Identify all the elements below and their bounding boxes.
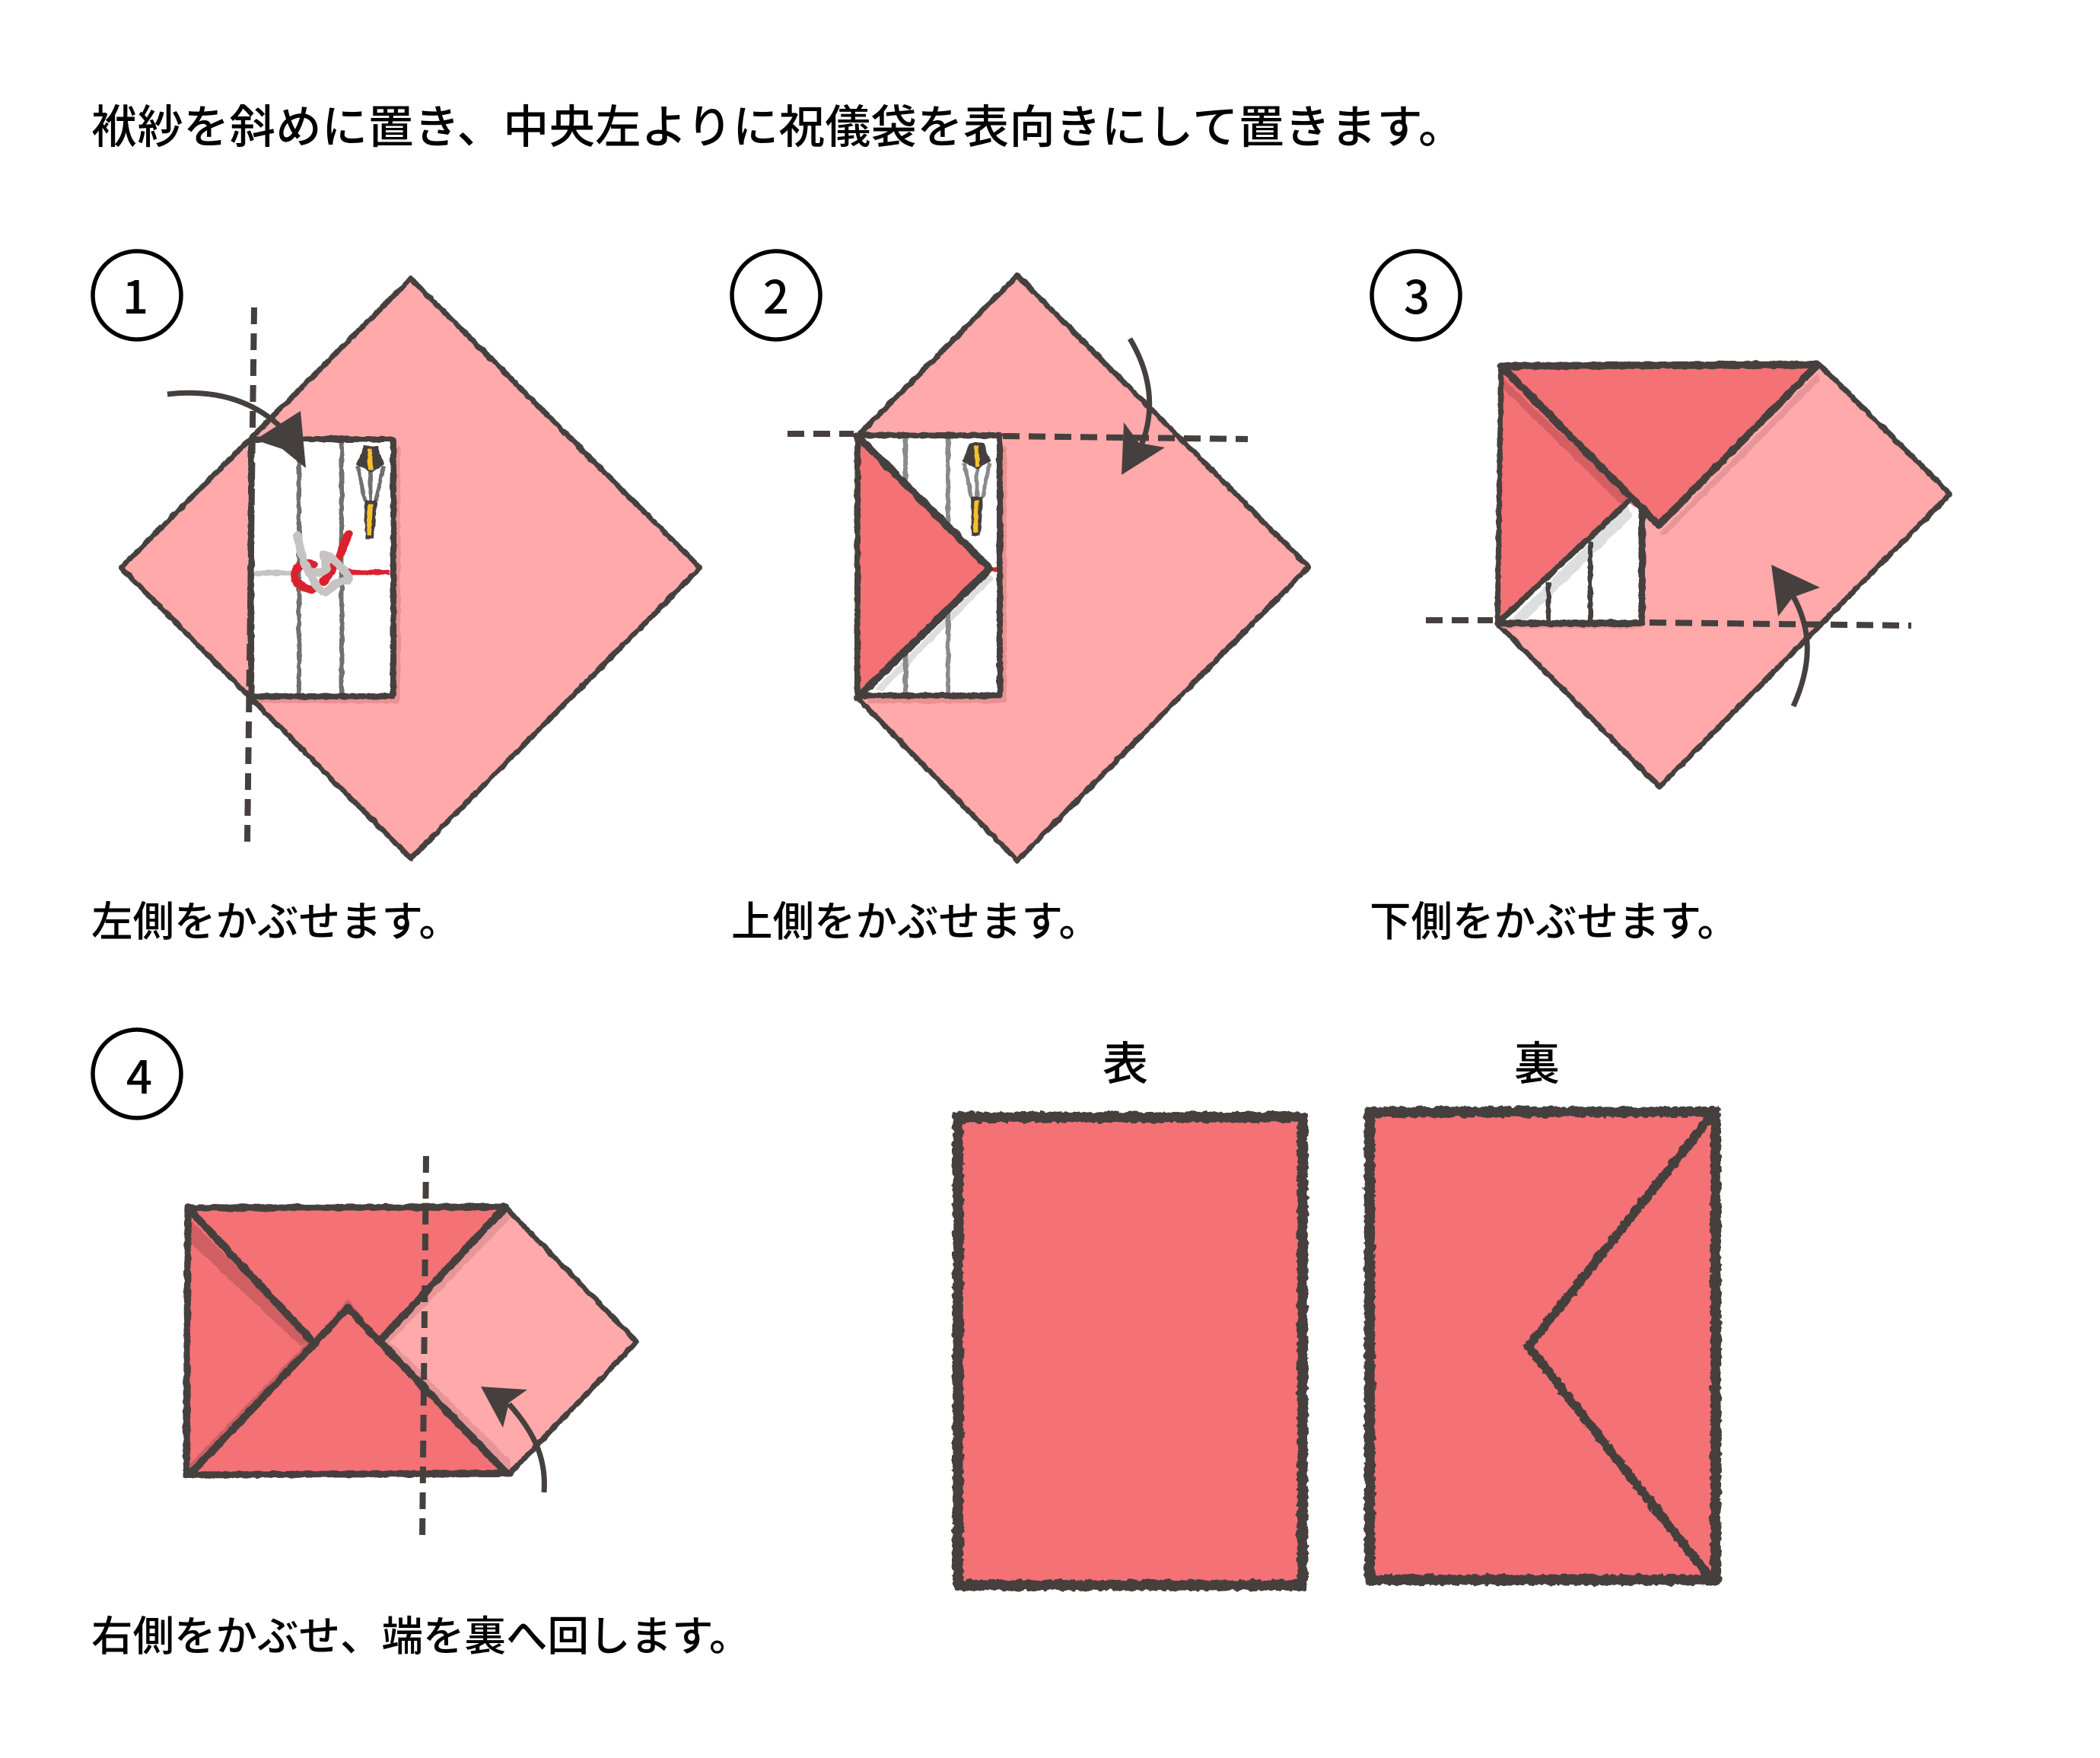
caption: 上側をかぶせます。 bbox=[731, 888, 1100, 948]
step number 3 bbox=[1372, 251, 1460, 339]
fold line bbox=[1426, 620, 1911, 626]
step number 2: 2 bbox=[763, 261, 789, 327]
arrow bbox=[1771, 565, 1820, 706]
fold line bbox=[422, 1156, 426, 1538]
furoshiki diamond with envelope bbox=[121, 279, 700, 858]
step number 2 bbox=[732, 251, 820, 339]
back envelope bbox=[1370, 1112, 1716, 1580]
title: 袱紗を斜めに置き、中央左よりに祝儀袋を表向きにして置きます。 bbox=[91, 91, 1465, 157]
noshi bbox=[963, 443, 991, 536]
arrow bbox=[481, 1387, 544, 1492]
furoshiki with three flaps folded bbox=[185, 1207, 637, 1475]
fold line bbox=[247, 307, 254, 842]
panel: step 4 bbox=[91, 1030, 751, 1663]
front envelope bbox=[958, 1117, 1303, 1585]
label: front: 表 bbox=[1102, 1027, 1148, 1094]
step number 3: 3 bbox=[1404, 261, 1430, 327]
fold line bbox=[788, 434, 1248, 439]
panel: finished back bbox=[1370, 1027, 1716, 1580]
arrow bbox=[167, 393, 306, 468]
panel: step 1 bbox=[91, 251, 700, 948]
furoshiki with left flap folded bbox=[858, 275, 1309, 861]
caption: 左側をかぶせます。 bbox=[91, 888, 460, 948]
noshi bbox=[356, 446, 384, 539]
arrow bbox=[1122, 339, 1165, 475]
step number 4: 4 bbox=[126, 1041, 152, 1107]
panel: finished front bbox=[958, 1027, 1303, 1585]
caption: 下側をかぶせます。 bbox=[1370, 888, 1739, 948]
step number 1: 1 bbox=[123, 261, 148, 327]
panel: step 2 bbox=[731, 251, 1309, 948]
caption: 右側をかぶせ、端を裏へ回します。 bbox=[91, 1603, 751, 1663]
panel: step 3 bbox=[1370, 251, 1950, 948]
label: back: 裏 bbox=[1514, 1027, 1560, 1094]
step number 1 bbox=[93, 251, 181, 339]
furoshiki with left and top flaps folded bbox=[1497, 363, 1950, 787]
knot bbox=[294, 534, 348, 592]
step number 4 bbox=[93, 1030, 181, 1118]
